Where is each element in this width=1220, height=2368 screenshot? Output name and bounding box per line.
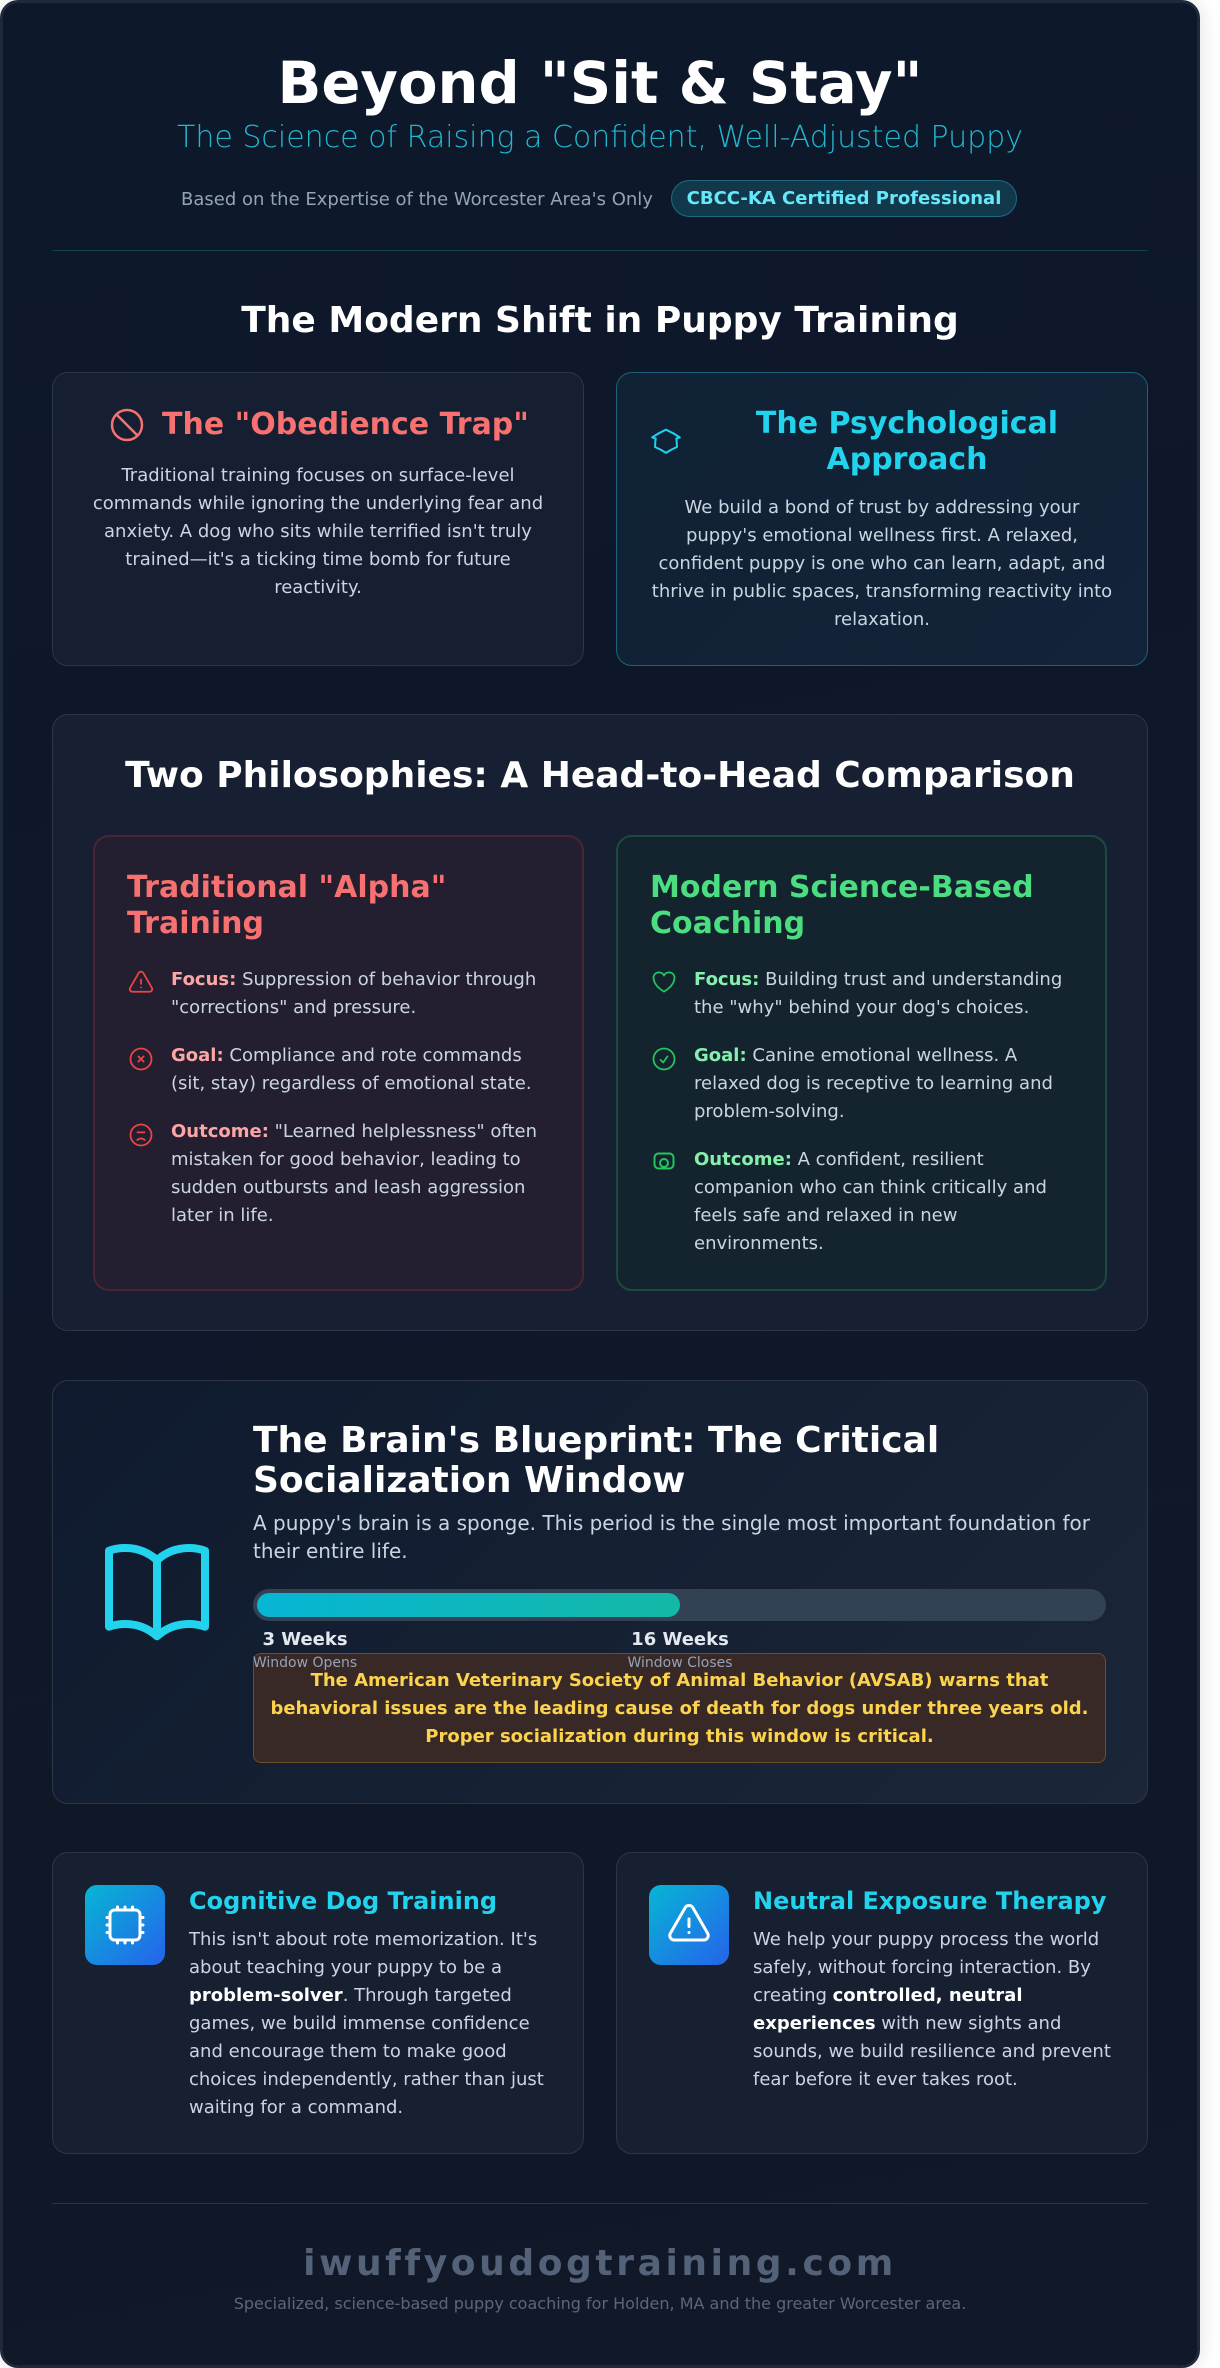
label: window opens: Window Opens [253, 1655, 357, 1671]
text: obedience trap: reactivity. [274, 577, 362, 598]
text: neutral exposure: safely, without forcing interaction. By [753, 1957, 1091, 1978]
panel: obedience trap [52, 372, 584, 666]
label: 3 weeks: 3 Weeks [262, 1629, 348, 1650]
credential badge [671, 180, 1017, 217]
text: modern focus: the "why" behind your dog's choices. [694, 997, 1029, 1018]
heading: modern coaching [650, 870, 1034, 941]
icon: heart [652, 972, 676, 992]
heading: traditional training: Training [127, 906, 264, 941]
timeline fill [257, 1593, 680, 1617]
panel: comparison [52, 714, 1148, 1331]
text: cognitive training: problem-solver. Through targeted [189, 1985, 512, 2006]
title: Beyond "Sit & Stay" [277, 50, 923, 117]
text: traditional outcome: Outcome: "Learned helplessness" often [171, 1121, 537, 1142]
icon: check circle [652, 1048, 676, 1070]
text: cognitive training: games, we build immense confidence [189, 2013, 530, 2034]
heading: psychological approach: Approach [827, 442, 987, 477]
text: cognitive training: waiting for a command. [189, 2097, 403, 2118]
text: psychological approach: We build a bond of trust by addressing your [685, 497, 1079, 518]
credential line: Based on the Expertise of the Worcester Area's Only [181, 189, 653, 210]
icon: academic cap [651, 428, 681, 454]
text: neutral exposure: experiences with new sights and [753, 2013, 1061, 2034]
text: modern outcome: Outcome: A confident, resilient [694, 1149, 984, 1170]
heading: cognitive training: Cognitive Dog Training [189, 1887, 497, 1915]
icon: prohibited [110, 408, 144, 442]
text: neutral exposure: sounds, we build resilience and prevent [753, 2041, 1111, 2062]
text: cognitive training: choices independently, rather than just [189, 2069, 544, 2090]
text: modern outcome [694, 1149, 1047, 1254]
text: traditional focus: Focus: Suppression of behavior through [171, 969, 536, 990]
text: modern goal: relaxed dog is receptive to learning and [694, 1073, 1053, 1094]
panel: cognitive dog training [52, 1852, 584, 2154]
text: cognitive training [188, 1929, 544, 2118]
heading: modern coaching: Modern Science-Based [650, 870, 1034, 905]
text: sponge intro: their entire life. [253, 1539, 408, 1563]
heading: obedience trap: The "Obedience Trap" [162, 407, 529, 442]
text: neutral exposure: creating controlled, neutral [753, 1985, 1022, 2006]
text: sponge intro [253, 1511, 1090, 1563]
heading: neutral exposure: Neutral Exposure Therapy [753, 1887, 1107, 1915]
text: psychological approach: thrive in public spaces, transforming reactivity into [652, 581, 1112, 602]
icon: x circle [130, 1048, 152, 1070]
timeline bar [253, 1589, 1106, 1621]
text: neutral exposure: We help your puppy process the world [753, 1929, 1099, 1950]
text: traditional goal: (sit, stay) regardless of emotional state. [171, 1073, 532, 1094]
alert: AVSAB warning: Proper socialization during this window is critical. [425, 1726, 934, 1747]
text: modern goal [694, 1045, 1053, 1122]
heading: traditional training [127, 870, 446, 941]
alert: AVSAB warning: behavioral issues are the leading cause of death for dogs under three years old. [270, 1698, 1089, 1719]
heading: modern coaching: Coaching [650, 906, 805, 941]
text: traditional focus: "corrections" and pressure. [171, 997, 416, 1018]
text: neutral exposure [753, 1929, 1111, 2090]
panel: neutral exposure therapy [616, 1852, 1148, 2154]
heading: psychological approach [756, 406, 1058, 477]
text: modern goal: problem-solving. [694, 1101, 845, 1122]
icon: chip [85, 1885, 165, 1965]
heading: critical window: Socialization Window [253, 1460, 685, 1501]
text: traditional goal: Goal: Compliance and rote commands [171, 1045, 522, 1066]
icon: open book [105, 1544, 209, 1640]
text: neutral exposure: fear before it ever takes root. [753, 2069, 1018, 2090]
text: modern focus [694, 969, 1062, 1018]
heading: critical window: The Brain's Blueprint: The Critical [253, 1420, 939, 1461]
text: traditional outcome [171, 1121, 537, 1226]
text: psychological approach: relaxation. [834, 609, 930, 630]
credential badge: CBCC-KA Certified Professional [687, 188, 1001, 209]
footer domain: iwuffyoudogtraining.com [303, 2243, 897, 2284]
text: psychological approach [652, 497, 1112, 630]
text: traditional focus [171, 969, 536, 1018]
text: obedience trap: trained—it's a ticking time bomb for future [125, 549, 511, 570]
panel: psychological approach [616, 372, 1148, 666]
heading: critical window [253, 1420, 939, 1501]
alert: AVSAB warning: The American Veterinary Society of Animal Behavior (AVSAB) warns that [311, 1670, 1048, 1691]
text: modern outcome: environments. [694, 1233, 824, 1254]
text: traditional outcome: mistaken for good behavior, leading to [171, 1149, 521, 1170]
subtitle: The Science of Raising a Confident, Well-Adjusted Puppy [177, 120, 1023, 155]
text: obedience trap: Traditional training focuses on surface-level [121, 465, 515, 486]
text: psychological approach: confident puppy is one who can learn, adapt, and [659, 553, 1105, 574]
panel: critical socialization window [52, 1380, 1148, 1804]
icon: warning [128, 970, 154, 993]
label: 16 weeks: 16 Weeks [631, 1629, 729, 1650]
text: obedience trap: commands while ignoring the underlying fear and [93, 493, 543, 514]
icon: badge [654, 1152, 674, 1170]
panel: modern coaching [616, 835, 1107, 1291]
text: traditional goal [171, 1045, 532, 1094]
icon: frown face [130, 1124, 152, 1146]
icon: warning triangle [649, 1885, 729, 1965]
heading: psychological approach: The Psychological [756, 406, 1058, 441]
heading: comparison: Two Philosophies: A Head-to-Head Comparison [125, 755, 1075, 796]
text: cognitive training: about teaching your puppy to be a [189, 1957, 502, 1978]
panel: traditional training [93, 835, 584, 1291]
text: cognitive training: and encourage them to make good [189, 2041, 507, 2062]
heading: traditional training: Traditional "Alpha" [127, 870, 446, 905]
text: modern outcome: feels safe and relaxed in new [694, 1205, 957, 1226]
text: cognitive training: This isn't about rote memorization. It's [189, 1929, 537, 1950]
text: traditional outcome: sudden outbursts and leash aggression [171, 1177, 525, 1198]
text: modern focus: Focus: Building trust and understanding [694, 969, 1062, 990]
text: obedience trap: anxiety. A dog who sits while terrified isn't truly [104, 521, 532, 542]
heading: modern shift: The Modern Shift in Puppy Training [241, 300, 959, 341]
text: modern goal: Goal: Canine emotional wellness. A [694, 1045, 1017, 1066]
text: sponge intro: A puppy's brain is a sponge. This period is the single most important foundation for [253, 1511, 1090, 1535]
alert: AVSAB warning [253, 1653, 1106, 1763]
footer tagline: Specialized, science-based puppy coaching for Holden, MA and the greater Worcester area. [234, 2294, 966, 2313]
text: traditional outcome: later in life. [171, 1205, 274, 1226]
label: window closes: Window Closes [627, 1655, 733, 1671]
text: modern outcome: companion who can think critically and [694, 1177, 1047, 1198]
text: obedience trap [93, 465, 543, 598]
text: psychological approach: puppy's emotional wellness first. A relaxed, [686, 525, 1078, 546]
